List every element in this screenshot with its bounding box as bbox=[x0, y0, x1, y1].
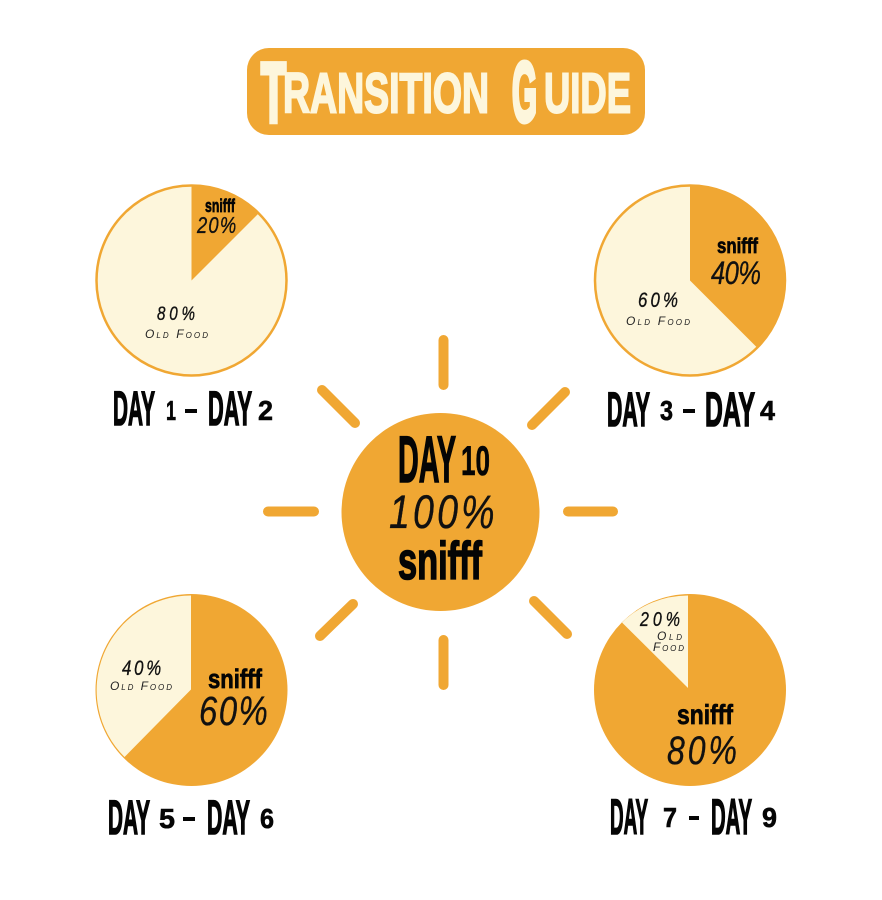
panel: day 1 - day 2 pie: Old Food bbox=[145, 327, 208, 341]
panel: day 3 - day 4 pie: snifff bbox=[717, 235, 759, 258]
label: day 7 - day 9: 9 bbox=[762, 802, 777, 833]
label: day 3 - day 4: DAY bbox=[705, 384, 755, 437]
label: day 3 - day 4 bbox=[607, 384, 775, 437]
label: day 7 - day 9 bbox=[610, 789, 777, 845]
panel: day 7 - day 9 pie: Old bbox=[657, 629, 682, 643]
panel: day 7 - day 9 pie: 20% bbox=[639, 608, 680, 630]
panel: day 1 - day 2 pie: 80% bbox=[157, 302, 195, 324]
center sun: day 10: 100% bbox=[389, 486, 495, 539]
label: day 5 - day 6 bbox=[108, 792, 274, 845]
label: day 1 - day 2: DAY bbox=[208, 383, 252, 436]
center sun: day 10: 10 bbox=[461, 437, 490, 484]
title banner bbox=[247, 45, 645, 140]
panel: day 3 - day 4 pie: 60% bbox=[638, 289, 678, 313]
label: day 5 - day 6: DAY bbox=[108, 792, 150, 845]
panel: day 7 - day 9 pie: snifff bbox=[677, 699, 734, 730]
panel: day 3 - day 4 pie: 40% bbox=[711, 256, 761, 292]
panel: day 1 - day 2 pie: 20% bbox=[196, 213, 236, 239]
label: day 3 - day 4: 3 bbox=[660, 395, 673, 426]
label: day 3 - day 4: DAY bbox=[607, 384, 650, 437]
panel: day 5 - day 6 pie: Old Food bbox=[110, 679, 172, 693]
panel: day 5 - day 6 pie: 60% bbox=[199, 687, 268, 734]
center sun: day 10: DAY bbox=[398, 422, 456, 496]
panel: day 7 - day 9 pie: 80% bbox=[667, 728, 737, 773]
panel: day 5 - day 6 pie: snifff bbox=[208, 664, 263, 694]
title banner: UIDE bbox=[544, 62, 631, 126]
title banner: T bbox=[261, 46, 286, 140]
label: day 1 - day 2 bbox=[113, 383, 273, 436]
label: day 5 - day 6: 6 bbox=[260, 803, 274, 834]
label: day 5 - day 6: 5 bbox=[159, 803, 175, 834]
panel: day 1 - day 2 pie: snifff bbox=[205, 196, 236, 216]
label: day 1 - day 2: 1 bbox=[166, 395, 176, 426]
label: day 7 - day 9: 7 bbox=[663, 802, 677, 833]
panel: day 5 - day 6 pie bbox=[96, 594, 288, 786]
label: day 1 - day 2: 2 bbox=[258, 395, 273, 426]
label: day 7 - day 9: DAY bbox=[711, 789, 752, 845]
label: day 7 - day 9: DAY bbox=[610, 789, 648, 845]
label: day 3 - day 4: 4 bbox=[760, 395, 775, 426]
center sun: day 10: snifff bbox=[398, 532, 482, 591]
panel: day 3 - day 4 pie: Old Food bbox=[626, 314, 690, 328]
label: day 1 - day 2: DAY bbox=[113, 383, 155, 436]
center sun: day 10 bbox=[342, 413, 540, 611]
panel: day 1 - day 2 pie bbox=[96, 185, 286, 376]
title banner: RANSITION bbox=[283, 62, 489, 126]
label: day 5 - day 6: DAY bbox=[207, 792, 250, 845]
panel: day 7 - day 9 pie bbox=[594, 594, 786, 786]
sun rays bbox=[268, 340, 613, 685]
panel: day 3 - day 4 pie bbox=[595, 185, 785, 376]
title banner: G bbox=[512, 45, 537, 139]
panel: day 5 - day 6 pie: 40% bbox=[122, 657, 161, 681]
panel: day 7 - day 9 pie: Food bbox=[653, 640, 684, 654]
